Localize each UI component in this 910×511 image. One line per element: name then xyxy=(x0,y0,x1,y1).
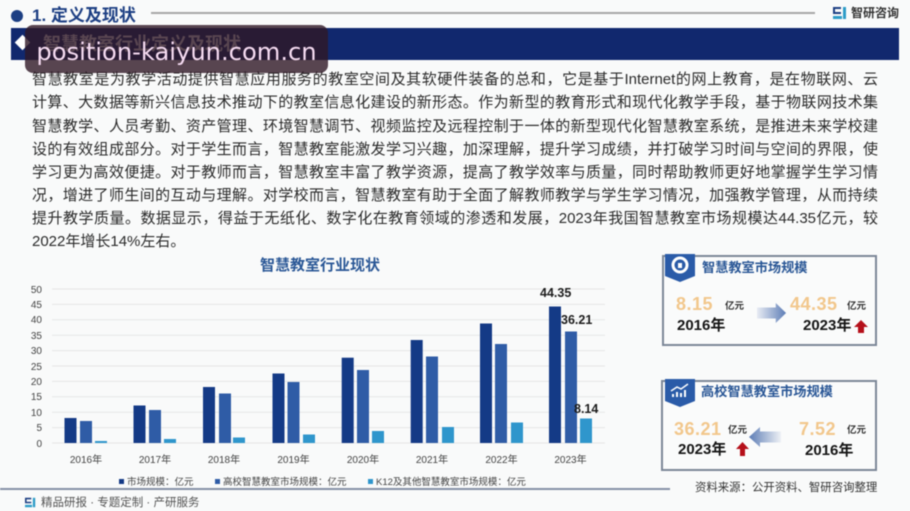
y axis labels: 5 xyxy=(36,423,42,434)
y axis labels: 0 xyxy=(36,439,42,450)
footer rule xyxy=(0,488,670,490)
bar chart xyxy=(30,285,604,488)
body paragraph: 智慧教室是为教学活动提供智慧应用服务的教室空间及其软硬件装备的总和，它是基于Internet的网上教育，是在物联网、云 xyxy=(32,71,878,88)
2023 year: 2023年 xyxy=(803,317,851,334)
panel: smart classroom market size xyxy=(662,255,877,346)
panel title: 高校智慧教室市场规模 xyxy=(701,384,833,399)
y axis labels xyxy=(31,285,42,450)
2016 value: 7.52 xyxy=(799,419,836,439)
arrow: leftward comparison xyxy=(748,426,781,448)
2023 unit: 亿元 xyxy=(728,425,747,436)
y axis labels: 45 xyxy=(31,300,42,311)
icon: badge line chart xyxy=(664,378,696,408)
2016 unit: 亿元 xyxy=(847,425,866,436)
panel: higher education smart classroom market size xyxy=(661,380,877,471)
banner title: 智慧教室行业定义及现状 xyxy=(43,34,241,54)
x axis labels: 2021年 xyxy=(416,453,448,466)
x axis labels: 2022年 xyxy=(485,453,518,466)
2016 unit: 亿元 xyxy=(725,301,744,312)
bullet dot xyxy=(11,10,23,22)
body paragraph: 提升教学质量。数据显示，得益于无纸化、数字化在教育领域的渗透和发展，2023年我国智慧教室市场规模达44.35亿元，较 xyxy=(32,210,878,227)
legend: K12及其他智慧教室市场规模：亿元 xyxy=(376,476,526,488)
y axis labels: 50 xyxy=(31,285,42,296)
y axis labels: 30 xyxy=(31,346,42,357)
2023 value: 36.21 xyxy=(674,419,722,439)
y axis labels: 20 xyxy=(31,377,42,388)
x axis labels: 2023年 xyxy=(554,453,587,466)
value labels: 36.21 xyxy=(561,313,592,327)
body paragraph: 计算、大数据等新兴信息技术推动下的教室信息化建设的新形态。作为新型的教育形式和现代化教学手段，基于物联网技术集 xyxy=(32,94,878,111)
section heading xyxy=(10,5,136,25)
y axis labels: 35 xyxy=(31,331,42,342)
2016 value: 8.15 xyxy=(676,294,713,314)
value labels: 44.35 xyxy=(540,286,571,300)
value labels xyxy=(540,286,598,416)
icon: footer logo xyxy=(24,496,36,508)
body paragraph: 2022年增长14%左右。 xyxy=(32,233,185,250)
icon: red up arrow xyxy=(736,442,750,457)
y axis labels: 15 xyxy=(31,392,42,403)
x axis labels: 2016年 xyxy=(70,453,102,466)
panel title: 智慧教室市场规模 xyxy=(702,260,808,275)
2023 year: 2023年 xyxy=(678,441,726,458)
footer text: 精品研报 · 专题定制 · 产研服务 xyxy=(41,497,199,509)
title banner xyxy=(11,28,899,60)
source note: 资料来源：公开资料、智研咨询整理 xyxy=(695,482,877,494)
icon: red up arrow xyxy=(854,320,868,334)
x axis labels: 2018年 xyxy=(208,453,240,466)
body paragraph: 设的有效组成部分。对于学生而言，智慧教室能激发学习兴趣，加深理解，提升学习成绩，并打破学习时间与空间的界限，使 xyxy=(32,141,878,158)
icon: badge chart ring xyxy=(664,253,696,283)
legend xyxy=(119,476,526,488)
x axis labels xyxy=(70,453,587,466)
series: K12 and other market size xyxy=(95,418,592,443)
legend: 市场规模：亿元 xyxy=(127,476,194,488)
x axis labels: 2017年 xyxy=(139,453,171,466)
watermark label xyxy=(25,25,328,73)
icon: diamond xyxy=(15,35,30,50)
y axis labels: 10 xyxy=(31,408,42,419)
body paragraph: 学习更为高效便捷。对于教师而言，智慧教室丰富了教学资源，提高了教学效率与质量，同时帮助教师更好地掌握学生学习情 xyxy=(32,164,878,181)
2023 value: 44.35 xyxy=(790,294,838,314)
section heading text: 1. 定义及现状 xyxy=(32,6,136,25)
series: market size xyxy=(64,306,561,443)
brand name: 智研咨询 xyxy=(851,6,899,20)
value labels: 8.14 xyxy=(574,402,598,416)
y axis labels: 40 xyxy=(31,315,42,326)
x axis labels: 2019年 xyxy=(277,453,310,466)
heading rule xyxy=(151,12,815,14)
icon: logo mark xyxy=(832,6,847,20)
watermark label: position-kaiyun.com.cn xyxy=(36,38,317,66)
series: higher education market size xyxy=(80,332,577,443)
arrow: growth xyxy=(757,303,786,323)
brand logo xyxy=(832,6,900,20)
footer xyxy=(24,496,200,509)
y axis labels: 25 xyxy=(31,362,42,373)
2023 unit: 亿元 xyxy=(847,301,866,312)
body paragraph xyxy=(32,70,878,250)
chart title: 智慧教室行业现状 xyxy=(260,257,380,274)
2016 year: 2016年 xyxy=(677,317,725,334)
x axis labels: 2020年 xyxy=(347,453,379,466)
legend: 高校智慧教室市场规模：亿元 xyxy=(223,476,347,488)
body paragraph: 智慧教学、人员考勤、资产管理、环境智慧调节、视频监控及远程控制于一体的新型现代化智慧教室系统，是推进未来学校建 xyxy=(32,118,878,135)
body paragraph: 况，增进了师生间的互动与理解。对学校而言，智慧教室有助于全面了解教师教学与学生学习情况，加强教学管理，从而持续 xyxy=(32,187,878,204)
2016 year: 2016年 xyxy=(805,442,853,459)
